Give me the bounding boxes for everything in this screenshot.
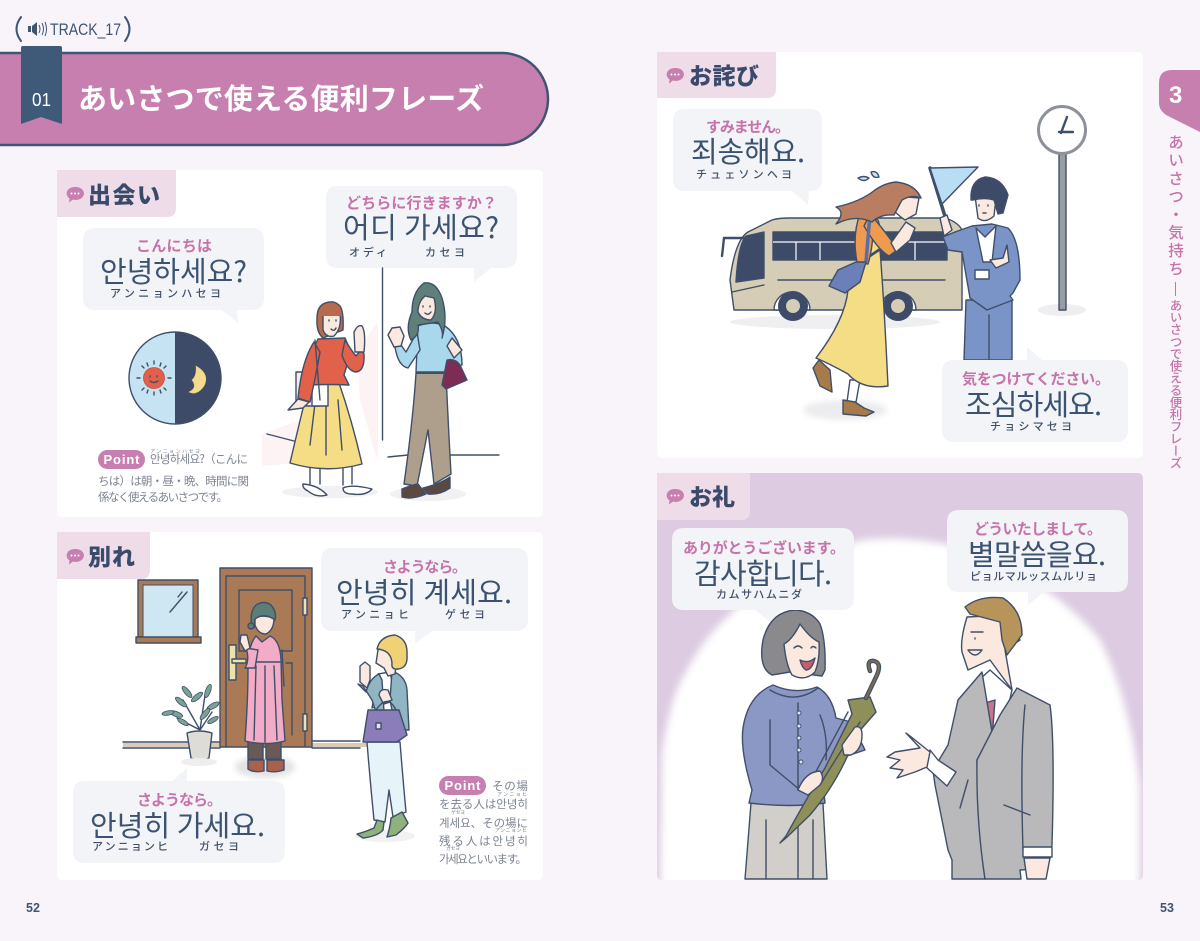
speech bubble: 気をつけてください: 조심하세요. (965, 382, 1102, 424)
point note: その場 (492, 778, 528, 794)
speech bubble: 気をつけてください (942, 347, 1128, 442)
chapter side label: あいさつで使える便利フレーズ (1166, 299, 1186, 469)
point note (98, 448, 249, 505)
speech bubble: どういたしまして (947, 510, 1128, 605)
speech bubble: 가세요: さようなら。 (137, 789, 222, 810)
audio track label: TRACK_17 (50, 20, 121, 39)
speech bubble: どういたしまして: どういたしまして。 (974, 518, 1102, 539)
point note: 残る人は안녕히 (439, 833, 528, 849)
chapter side label (1165, 134, 1187, 469)
speech bubble: 가세요: 안녕히 가세요. (90, 803, 265, 845)
point note: Point (104, 452, 140, 467)
speech bubble: 気をつけてください: チョシマセヨ (990, 418, 1072, 434)
speech bubble: こんにちは: アンニョンハセヨ (110, 285, 221, 301)
speech bubble: すみません: チュェソンヘヨ (696, 166, 792, 182)
speech bubble: どちらに行きますか: カセヨ (425, 244, 465, 260)
speech bubble: どちらに行きますか: 어디 가세요? (343, 205, 499, 247)
section tab: 別れ: 別れ (88, 538, 135, 572)
point note: アンニョンハセヨ (150, 448, 200, 455)
speech bubble: 가세요 (73, 768, 285, 863)
section tab: 別れ (57, 532, 150, 579)
speech bubble: ありがとうございます: カムサハムニダ (716, 586, 802, 602)
speech bubble: 계세요: ゲセヨ (445, 606, 485, 622)
umbrella (780, 661, 879, 843)
point note: を去る人は안녕히 (439, 796, 528, 812)
speech bubble: どういたしまして: ピョルマルッスムルリョ (970, 568, 1097, 584)
panel: thanks (657, 473, 1143, 890)
speech bubble: 계세요 (321, 548, 528, 644)
point note: ちは）は朝・昼・晩、時間に関 (98, 473, 249, 489)
point note: Point (444, 778, 481, 793)
point note: 가세요といいます。 (439, 851, 527, 867)
speech bubble: どういたしまして: 별말씀을요. (968, 532, 1106, 574)
speech bubble: 가세요: アンニョンヒ (92, 838, 168, 854)
chapter tab: 3 (1169, 82, 1182, 109)
illustration: door scene (123, 568, 415, 842)
title: あいさつで使える便利フレーズ (78, 76, 484, 118)
page number 53: 53 (1160, 901, 1174, 915)
point note: アンニョヒ (497, 791, 527, 798)
speech bubble: すみません: すみません。 (706, 116, 790, 137)
speech bubble: どちらに行きますか: どちらに行きますか？ (346, 192, 497, 213)
bus (722, 218, 962, 329)
speech bubble: すみません (673, 109, 822, 205)
speech bubble: 계세요: さようなら。 (383, 556, 467, 577)
clock (1038, 106, 1086, 316)
bowing woman in yellow dress (803, 172, 921, 420)
window (136, 580, 201, 643)
door (220, 568, 312, 747)
section tab: 出会い (57, 170, 176, 217)
staff member with flag (930, 167, 1020, 360)
speech bubble: こんにちは: 안녕하세요? (100, 249, 247, 291)
speech bubble: 가세요: ガセヨ (199, 838, 239, 854)
speech bubble: 気をつけてください: 気をつけてください。 (962, 368, 1110, 389)
point note: ガセヨ (446, 845, 460, 852)
section tab: 出会い: 出会い (88, 176, 160, 210)
panel: meeting (57, 170, 543, 517)
title banner (0, 46, 548, 145)
illustration: woman with umbrella (742, 610, 879, 879)
speech bubble: 계세요: アンニョヒ (341, 606, 409, 622)
speech bubble: どちらに行きますか: オディ (349, 244, 387, 260)
panel: apology (657, 52, 1143, 458)
bookmark: 01: 01 (32, 90, 51, 110)
illustration: man in suit (887, 597, 1053, 879)
section tab: お礼 (657, 473, 750, 520)
speech bubble: ありがとうございます: ありがとうございます。 (683, 537, 845, 558)
point note: 係なく使えるあいさつです。 (98, 489, 228, 505)
audio track label (16, 17, 130, 41)
speech bubble: どちらに行きますか (326, 186, 517, 282)
woman with purple bag (355, 635, 415, 842)
speech bubble: こんにちは (83, 228, 264, 323)
chapter tab (1159, 70, 1200, 132)
icon: day and night circle (129, 332, 221, 424)
point note: 안녕하세요?（こんに (150, 451, 248, 467)
woman in red top (288, 302, 372, 496)
chapter side label: あいさつ・気持ち (1165, 134, 1187, 276)
speech bubble: ありがとうございます: 감사합니다. (694, 551, 832, 593)
point note: ゲセヨ (451, 809, 465, 816)
point note (439, 776, 528, 867)
panel: parting (57, 532, 543, 880)
speech bubble: すみません: 죄송해요. (691, 129, 805, 171)
section tab: お詫び: お詫び (689, 57, 759, 91)
section tab: お礼: お礼 (689, 478, 735, 512)
illustration: bus stop scene (722, 106, 1086, 420)
icon: speaker (28, 22, 46, 36)
potted plant (162, 684, 220, 766)
illustration: two women greeting (262, 268, 499, 501)
page number 52: 52 (26, 901, 40, 915)
point note: アンニョンヒ (495, 827, 527, 834)
bookmark: 01 (21, 46, 62, 124)
speech bubble: 계세요: 안녕히 계세요. (336, 570, 512, 612)
section tab: お詫び (657, 52, 776, 98)
woman in pink dress (235, 602, 295, 778)
speech bubble: ありがとうございます (672, 528, 854, 622)
point note: 계세요、その場に (439, 815, 528, 831)
speech bubble: こんにちは: こんにちは (136, 235, 212, 256)
woman in blue sweater (388, 283, 467, 498)
